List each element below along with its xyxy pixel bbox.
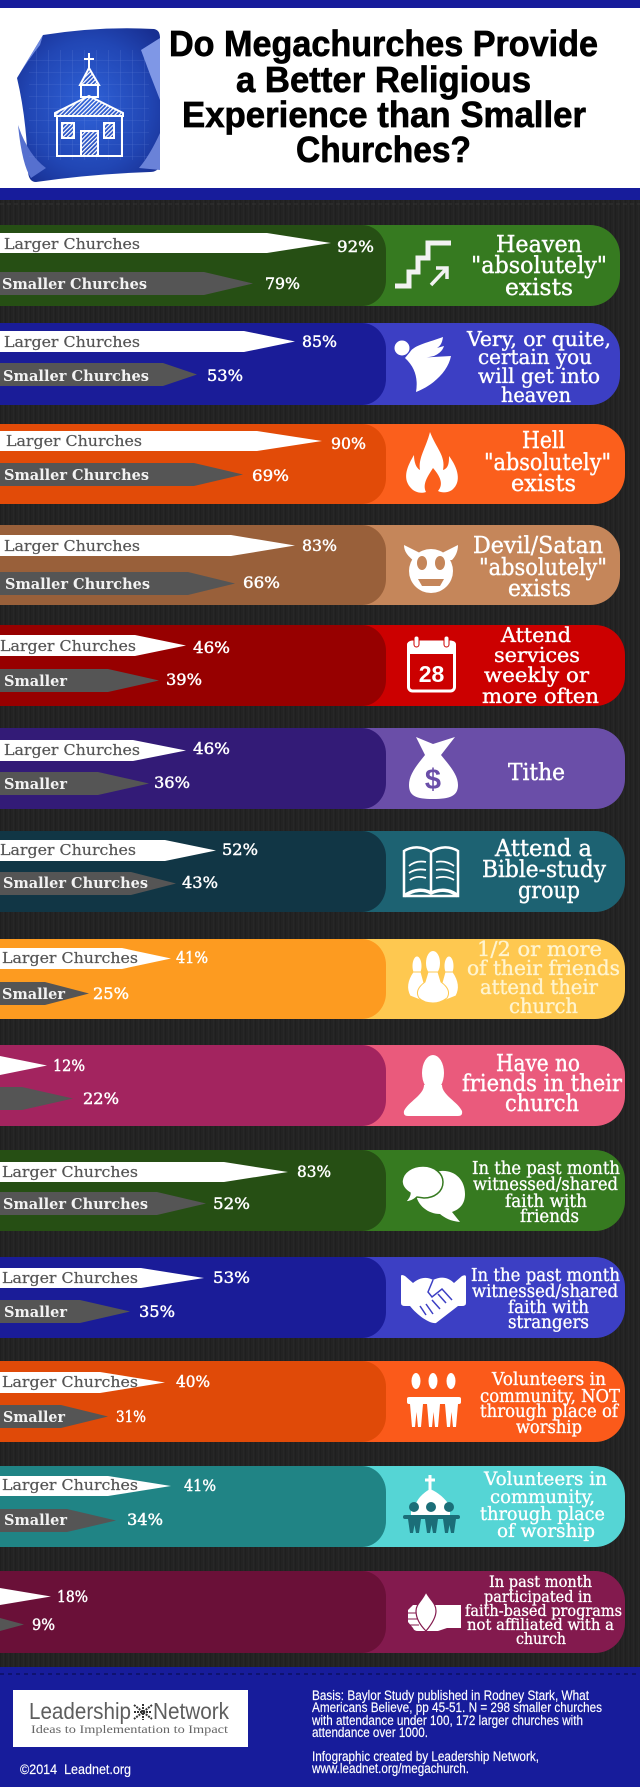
icon: devil face: [404, 545, 458, 593]
panel: heaven absolutely exists: Larger Churches: [4, 237, 140, 253]
panel: devil absolutely exists: [0, 525, 620, 605]
panel: witnessed to friends: friends: [520, 1207, 579, 1227]
icon: stairs: [395, 243, 451, 286]
panel: heaven absolutely exists: [0, 225, 620, 306]
panel: half of friends attend church: Smaller: [2, 986, 65, 1003]
panel: volunteers not through place of worship: Larger Churches: [2, 1375, 138, 1391]
panel: faith-based programs: participated in: [484, 1587, 592, 1606]
panel: no friends in church: 22%: [83, 1090, 119, 1108]
panel: witnessed to strangers: [0, 1257, 625, 1338]
panel: volunteers through place of worship: 34%: [127, 1511, 163, 1529]
icon: open book: [404, 847, 458, 896]
panel: volunteers not through place of worship: worship: [516, 1418, 582, 1438]
panel: volunteers through place of worship: through place: [480, 1504, 605, 1525]
panel: half of friends attend church: Larger Churches: [2, 951, 138, 967]
panel: no friends in church: church: [505, 1091, 579, 1117]
panel: witnessed to strangers: witnessed/shared: [472, 1282, 618, 1302]
panel: tithe: [0, 728, 625, 809]
panel: certain you will get into heaven: 53%: [207, 367, 243, 385]
panel: volunteers through place of worship: of worship: [497, 1521, 595, 1542]
panel: witnessed to friends: witnessed/shared: [473, 1175, 618, 1195]
icon: hand holding heart: [408, 1592, 461, 1631]
panel: witnessed to friends: In the past month: [472, 1159, 620, 1179]
title: Churches?: [296, 129, 471, 170]
panel: half of friends attend church: 1/2 or more: [477, 937, 602, 961]
icon: blueprint church: [17, 28, 160, 182]
panel: faith-based programs: 9%: [32, 1616, 55, 1634]
panel: attend services weekly: 46%: [193, 639, 230, 657]
icon: calendar: [407, 636, 456, 691]
panel: hell absolutely exists: 90%: [331, 435, 366, 453]
panel: half of friends attend church: of their friends: [467, 956, 620, 980]
source note: with attendance under 100, 172 larger churches with: [311, 1713, 583, 1728]
panel: attend services weekly: Larger Churches: [0, 639, 136, 655]
panel: attend services weekly: more often: [482, 684, 599, 708]
panel: bible study: Larger Churches: [0, 843, 136, 859]
title: [169, 23, 598, 170]
panel: devil absolutely exists: 83%: [302, 537, 337, 555]
panel: attend services weekly: 39%: [166, 671, 202, 689]
panel: bible study: Attend a: [494, 836, 592, 862]
panel: witnessed to strangers: In the past month: [471, 1266, 620, 1286]
panel: bible study: Bible-study: [482, 857, 606, 883]
panel: witnessed to friends: Larger Churches: [2, 1165, 138, 1181]
panel: certain you will get into heaven: [0, 323, 620, 407]
panel: tithe: Tithe: [508, 760, 565, 786]
icon: money bag: [409, 737, 458, 799]
panel: tithe: 36%: [154, 774, 190, 792]
icon: three volunteers: [407, 1373, 461, 1427]
panel: witnessed to friends: 83%: [297, 1163, 331, 1181]
panel: volunteers not through place of worship: through place of: [480, 1402, 619, 1422]
panel: tithe: 46%: [193, 740, 230, 758]
panel: hell absolutely exists: exists: [511, 471, 576, 497]
panel: witnessed to friends: [0, 1150, 625, 1231]
panel: certain you will get into heaven: will get into: [478, 364, 600, 388]
panel: faith-based programs: 18%: [57, 1588, 88, 1606]
panel: volunteers through place of worship: Smaller: [4, 1512, 67, 1529]
icon: angel: [394, 337, 451, 392]
panel: heaven absolutely exists: "absolutely": [471, 253, 607, 279]
logo: Leadership Network: Leadership: [29, 1698, 131, 1724]
icon: handshake: [401, 1275, 466, 1323]
title: Do Megachurches Provide: [169, 23, 598, 64]
panel: volunteers through place of worship: 41%: [184, 1477, 216, 1495]
panel: volunteers through place of worship: community,: [490, 1487, 595, 1508]
icon: calendar: 28: [419, 661, 444, 687]
source note: attendance over 1000.: [312, 1725, 428, 1740]
panel: witnessed to friends: Smaller Churches: [3, 1196, 148, 1213]
source note: Americans Believe, pp 45-51. N = 298 smaller churches: [312, 1700, 602, 1715]
panel: certain you will get into heaven: Larger Churches: [4, 335, 140, 351]
panel: volunteers through place of worship: Larger Churches: [2, 1478, 138, 1494]
panel: no friends in church: [0, 1045, 625, 1126]
icon: three people: [408, 951, 458, 1003]
panel: devil absolutely exists: Smaller Churches: [5, 576, 150, 593]
panel: attend services weekly: Smaller: [4, 673, 67, 690]
panel: certain you will get into heaven: Smaller Churches: [3, 368, 149, 385]
header: [0, 0, 640, 204]
panel: witnessed to friends: 52%: [213, 1195, 250, 1213]
panel: volunteers not through place of worship: community, NOT: [480, 1387, 620, 1407]
panel: witnessed to friends: faith with: [505, 1192, 587, 1212]
panel: faith-based programs: not affiliated with a: [467, 1615, 614, 1634]
logo: Leadership Network: Ideas to Implementation to Impact: [31, 1722, 229, 1736]
panel: heaven absolutely exists: Heaven: [496, 232, 582, 258]
panel: devil absolutely exists: 66%: [243, 574, 280, 592]
panel: hell absolutely exists: Hell: [522, 428, 565, 454]
panel: devil absolutely exists: "absolutely": [479, 555, 607, 581]
panel: certain you will get into heaven: certain you: [478, 345, 592, 369]
panel: bible study: 43%: [182, 874, 218, 892]
panel: tithe: Larger Churches: [4, 743, 140, 759]
panel: certain you will get into heaven: heaven: [501, 383, 571, 407]
panel: hell absolutely exists: Larger Churches: [6, 434, 142, 450]
panel: faith-based programs: [0, 1571, 625, 1653]
icon: person: [404, 1055, 462, 1116]
logo: Leadership Network: [13, 1690, 248, 1747]
panel: hell absolutely exists: "absolutely": [484, 450, 611, 476]
panel: volunteers not through place of worship: 31%: [116, 1408, 146, 1426]
title: a Better Religious: [236, 59, 531, 100]
logo: Leadership Network: Network: [153, 1698, 229, 1724]
panel: bible study: [0, 831, 625, 912]
panel: faith-based programs: In past month: [489, 1572, 592, 1591]
source note: Basis: Baylor Study published in Rodney Stark, What: [312, 1688, 589, 1703]
panel: hell absolutely exists: Smaller Churches: [4, 467, 149, 484]
panel: no friends in church: 12%: [53, 1057, 85, 1075]
panel: half of friends attend church: 41%: [176, 949, 208, 967]
panel: faith-based programs: church: [516, 1629, 566, 1648]
panel: tithe: Smaller: [4, 776, 67, 793]
panel: witnessed to strangers: Smaller: [4, 1304, 67, 1321]
panel: hell absolutely exists: 69%: [252, 467, 289, 485]
panel: faith-based programs: faith-based programs: [465, 1601, 622, 1620]
panel: attend services weekly: weekly or: [484, 663, 589, 687]
panel: half of friends attend church: [0, 937, 625, 1019]
panel: volunteers not through place of worship: 40%: [176, 1373, 210, 1391]
icon: flame: [406, 432, 458, 493]
panel: heaven absolutely exists: 79%: [265, 275, 300, 293]
panel: attend services weekly: Attend: [500, 623, 571, 647]
icon: money bag: $: [425, 764, 441, 796]
panel: heaven absolutely exists: Smaller Churches: [2, 276, 147, 293]
panel: half of friends attend church: attend their: [480, 975, 598, 999]
icon: church with people: [403, 1475, 460, 1533]
panel: volunteers through place of worship: [0, 1466, 625, 1547]
panel: volunteers through place of worship: Volunteers in: [483, 1469, 607, 1490]
panel: witnessed to strangers: 35%: [139, 1303, 175, 1321]
panel: hell absolutely exists: [0, 424, 625, 504]
panel: certain you will get into heaven: Very, or quite,: [466, 327, 611, 351]
source note: Infographic created by Leadership Network,: [312, 1749, 539, 1764]
panel: witnessed to strangers: 53%: [213, 1269, 250, 1287]
panel: volunteers not through place of worship: Volunteers in: [491, 1370, 606, 1390]
panel: devil absolutely exists: Devil/Satan: [473, 533, 603, 559]
panel: no friends in church: friends in their: [462, 1071, 622, 1097]
title: Experience than Smaller: [182, 94, 586, 135]
panel: volunteers not through place of worship: [0, 1361, 625, 1442]
footer: [0, 1667, 640, 1787]
panel: witnessed to strangers: strangers: [508, 1313, 589, 1333]
panel: devil absolutely exists: Larger Churches: [4, 539, 140, 555]
panel: half of friends attend church: church: [509, 994, 578, 1018]
panel: bible study: 52%: [222, 841, 258, 859]
source note: www.leadnet.org/megachurch.: [311, 1761, 469, 1776]
panel: witnessed to strangers: Larger Churches: [2, 1271, 138, 1287]
panel: witnessed to strangers: faith with: [508, 1298, 589, 1318]
panel: heaven absolutely exists: 92%: [337, 238, 374, 256]
panel: devil absolutely exists: exists: [508, 576, 571, 602]
panel: certain you will get into heaven: 85%: [302, 333, 337, 351]
panel: attend services weekly: services: [494, 643, 580, 667]
source note: [311, 1688, 602, 1776]
panel: volunteers not through place of worship: Smaller: [3, 1409, 65, 1426]
panel: no friends in church: Have no: [496, 1051, 580, 1077]
copyright: ©2014 Leadnet.org: [20, 1762, 131, 1777]
panel: heaven absolutely exists: exists: [505, 275, 573, 301]
panel: bible study: group: [518, 878, 580, 904]
icon: speech bubbles: [402, 1166, 465, 1222]
panel: half of friends attend church: 25%: [93, 985, 129, 1003]
panel: attend services weekly: [0, 623, 625, 708]
panel: bible study: Smaller Churches: [3, 875, 148, 892]
